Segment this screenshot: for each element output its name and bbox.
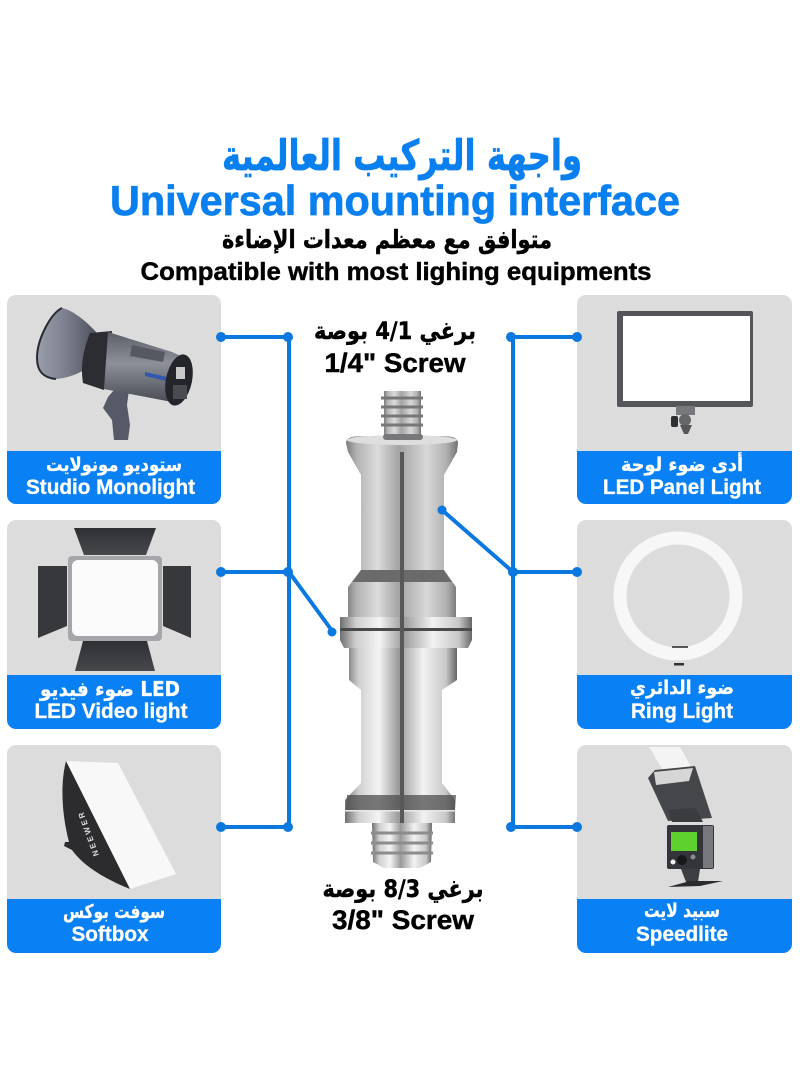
icon: ring light xyxy=(620,538,736,666)
label: 1/4 inch screw xyxy=(314,317,476,378)
label: Speedlite xyxy=(636,900,728,946)
top thread xyxy=(381,391,423,438)
label: Speedlite: سبيد لايت xyxy=(644,900,720,922)
Arabic title: واجهة التركيب العالمية xyxy=(222,131,582,181)
label: LED Video light: LED Video light xyxy=(34,700,188,723)
panel: Softbox xyxy=(7,745,221,953)
panel: Studio Monolight xyxy=(7,295,221,504)
Arabic subtitle: متوافق مع معظم معدات الإضاءة xyxy=(222,225,552,255)
English title: Universal mounting interface xyxy=(110,177,680,224)
label: LED Video light: LED ضوء فيديو xyxy=(39,677,180,701)
label: Ring Light: ضوء الدائري xyxy=(630,677,734,700)
centre collar xyxy=(340,617,472,648)
icon: LED video light xyxy=(38,528,191,671)
label: 3/8 inch screw: 3/8" Screw xyxy=(332,905,475,935)
label: 3/8 inch screw xyxy=(322,875,484,935)
label: Softbox: Softbox xyxy=(72,923,149,946)
icon: LED panel xyxy=(617,311,753,434)
icon: speedlite xyxy=(648,747,723,887)
heading: title and subtitle xyxy=(110,131,680,286)
panel: Speedlite xyxy=(577,745,792,953)
icon: softbox xyxy=(62,761,176,889)
label: Ring Light: Ring Light xyxy=(631,700,733,723)
connector lines right xyxy=(438,332,582,832)
label: Softbox xyxy=(63,901,165,946)
icon: softbox: NEEWER xyxy=(77,811,101,857)
label: 1/4 inch screw: برغي 4/1 بوصة xyxy=(314,317,476,345)
label: LED Panel Light: LED Panel Light xyxy=(603,476,761,499)
lower neck and flange xyxy=(345,648,457,823)
label: Studio Monolight: Studio Monolight xyxy=(26,476,195,499)
label: LED Panel Light: أدى ضوء لوحة xyxy=(621,452,743,476)
label: LED Video light xyxy=(34,677,188,723)
label: LED Panel Light xyxy=(603,452,761,499)
panel: Ring Light xyxy=(577,520,792,729)
bottom thread xyxy=(371,823,433,868)
label: Speedlite: Speedlite xyxy=(636,923,728,946)
label: Ring Light xyxy=(630,677,734,723)
label: 3/8 inch screw: برغي 8/3 بوصة xyxy=(322,875,484,903)
label: 1/4 inch screw: 1/4" Screw xyxy=(324,348,467,378)
panel: LED Video light xyxy=(7,520,221,729)
label: Studio Monolight: ستوديو مونولايت xyxy=(46,454,182,476)
English subtitle: Compatible with most lighing equipments xyxy=(140,258,652,286)
icon: monolight xyxy=(37,308,197,440)
top flange and neck xyxy=(346,434,458,617)
label: Softbox: سوفت بوكس xyxy=(63,901,165,923)
centre seam xyxy=(400,452,404,823)
label: Studio Monolight xyxy=(26,454,195,499)
spigot adapter photo xyxy=(340,391,472,868)
panel: LED Panel Light xyxy=(577,295,792,504)
connector lines left xyxy=(216,332,336,832)
